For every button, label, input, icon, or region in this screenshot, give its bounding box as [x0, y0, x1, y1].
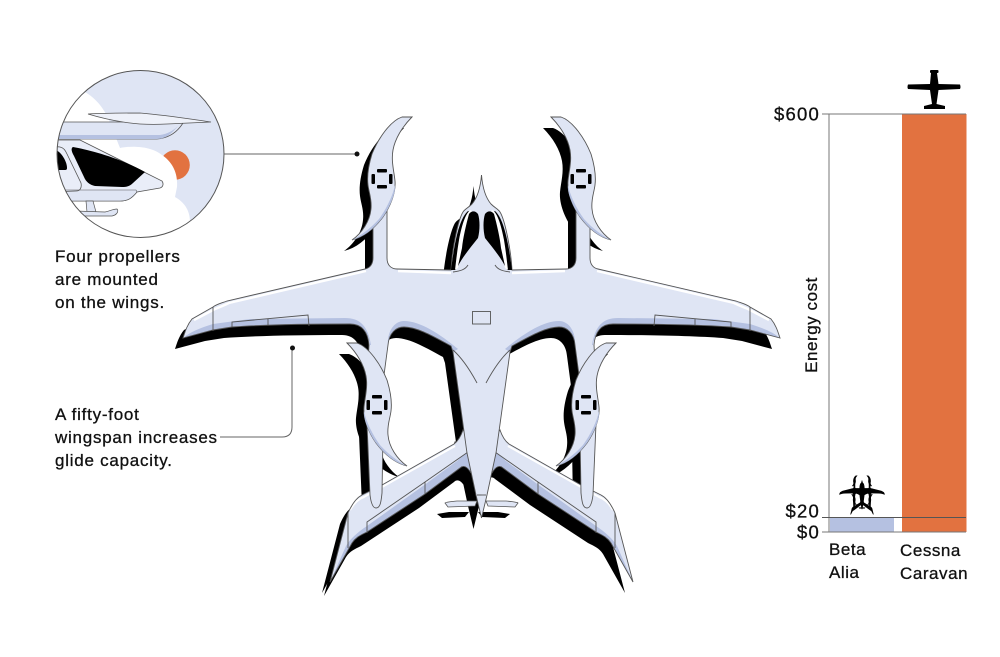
front left propeller — [352, 117, 412, 240]
landing skid — [86, 201, 96, 212]
text: wingspan caption — [54, 405, 218, 470]
rear right propeller — [556, 343, 616, 466]
category label: Cessna Caravan — [900, 541, 968, 583]
y axis labels — [774, 104, 820, 542]
text: wingspan caption: glide capacity. — [55, 451, 173, 470]
category label: Beta Alia: Beta — [829, 540, 866, 559]
side window — [58, 150, 67, 170]
front right propeller — [551, 117, 611, 240]
text: propellers caption — [55, 247, 181, 312]
text: propellers caption: are mounted — [55, 270, 159, 289]
rear left propeller — [347, 343, 407, 466]
text: propellers caption: on the wings. — [55, 293, 165, 312]
category label: Beta Alia: Alia — [829, 563, 860, 582]
callout leader: wingspan — [220, 346, 295, 437]
category label: Cessna Caravan: Cessna — [900, 541, 961, 560]
right half of aircraft — [477, 175, 780, 582]
category label: Cessna Caravan: Caravan — [900, 564, 968, 583]
bar: Cessna Caravan — [902, 114, 966, 532]
detail circle: propeller close-up — [50, 70, 224, 240]
bar chart: energy cost — [774, 70, 968, 583]
door outline — [58, 146, 82, 192]
y axis title: Energy cost — [802, 277, 821, 373]
icon: Beta Alia silhouette — [840, 476, 884, 514]
y axis labels: $20 — [786, 500, 820, 522]
cockpit window — [72, 147, 145, 187]
bar: Beta Alia — [830, 518, 894, 532]
category label: Beta Alia — [829, 540, 866, 582]
text: wingspan caption: wingspan increases — [54, 428, 218, 447]
y axis labels: $0 — [797, 522, 820, 542]
callout leader: propellers — [224, 152, 360, 156]
aircraft top view with drop shadow — [175, 117, 780, 596]
text: propellers caption: Four propellers — [55, 247, 181, 266]
y axis labels: $600 — [774, 104, 820, 124]
aircraft shadow — [175, 128, 772, 593]
aircraft cabin — [50, 140, 163, 201]
propeller blade — [88, 113, 211, 124]
icon: Cessna silhouette — [908, 70, 960, 109]
text: wingspan caption: A fifty-foot — [55, 405, 140, 424]
extra shadow under left rear wing — [324, 444, 465, 596]
orange sun — [160, 150, 190, 180]
wing section — [50, 122, 183, 139]
white cloud — [64, 92, 190, 237]
fuselage hatch — [472, 312, 490, 324]
left half of aircraft — [183, 175, 486, 582]
